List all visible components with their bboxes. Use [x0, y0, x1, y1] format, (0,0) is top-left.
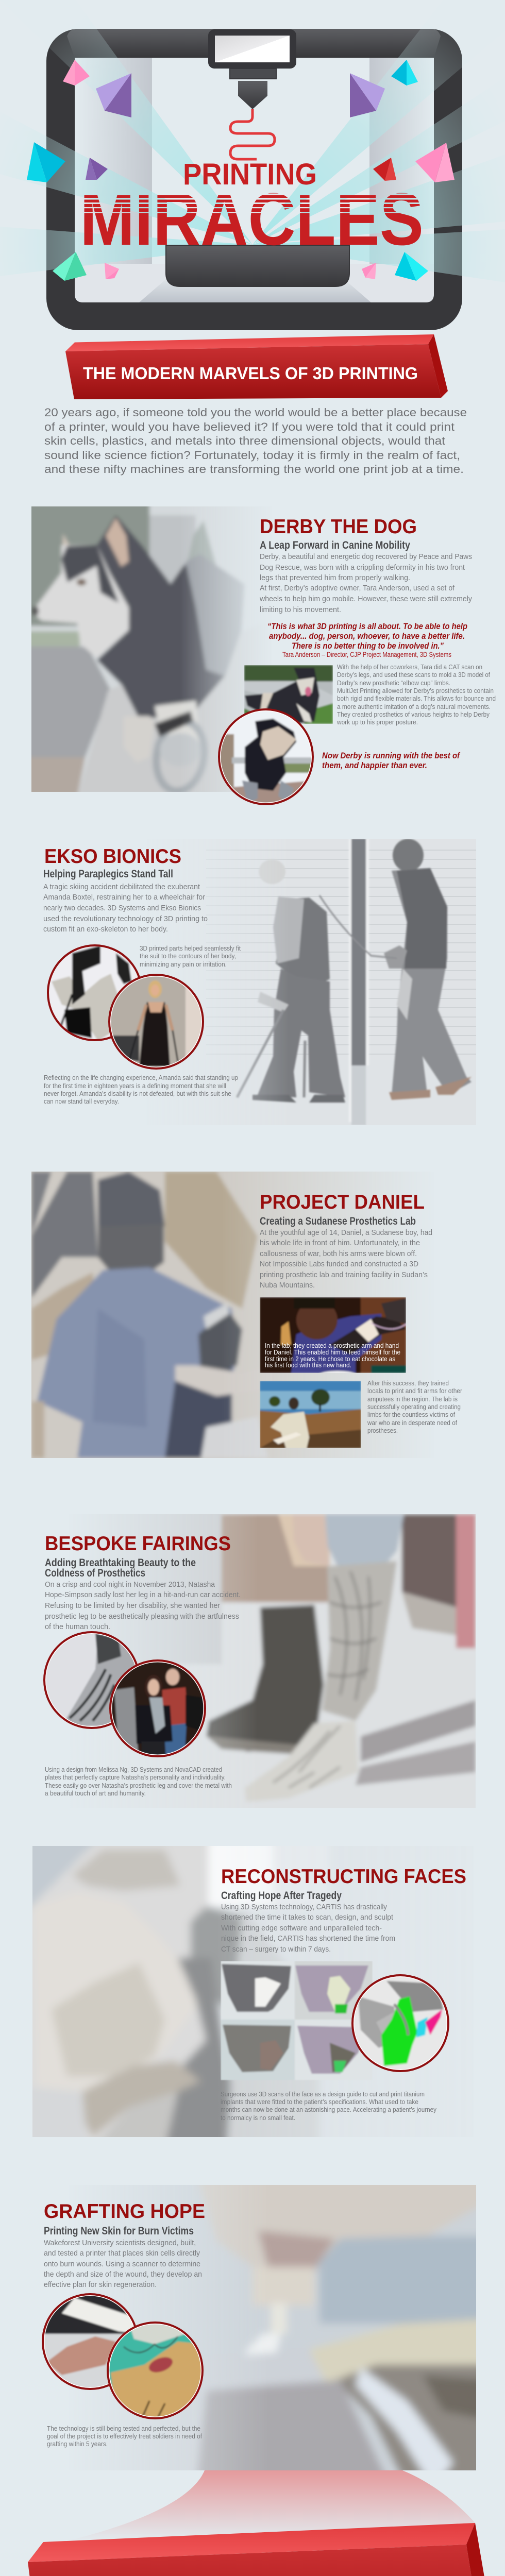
reflection text: [44, 1074, 238, 1105]
story text: legs that prevented him from properly walking.: [260, 573, 410, 582]
title: Printing Miracles: PRINTING: [183, 158, 317, 191]
reflection text: for the first time in eighteen years is a defining moment that she will: [44, 1082, 226, 1090]
gem shapes: [27, 60, 454, 281]
story text: Amanda Boxtel, restraining her to a wheelchair for: [43, 893, 205, 902]
story text: At first, Derby’s adoptive owner, Tara Anderson, used a set of: [260, 584, 455, 592]
photo grid: printed skull models: [221, 1961, 373, 2080]
photo: Daniel outdoors: [260, 1381, 361, 1448]
side text: [336, 664, 496, 726]
heading: EKSO BIONICS: [44, 845, 181, 868]
conclusion banner: [28, 2470, 497, 2576]
story text: effective plan for skin regeneration.: [44, 2280, 157, 2289]
story text: Wakeforest University scientists designed, built,: [44, 2239, 196, 2247]
story text: nearly two decades. 3D Systems and Ekso Bionics: [43, 904, 201, 912]
header: 3D printer illustration: [0, 0, 505, 330]
story text: [43, 883, 208, 934]
closing line: [322, 751, 460, 770]
story text: CT scan – surgery to within 7 days.: [221, 1945, 331, 1954]
panel: Bespoke Fairings: [44, 1510, 479, 1814]
intro paragraph: and these nifty machines are transforming the world one print job at a time.: [44, 463, 464, 476]
photo: skin printer nozzle: [52, 2169, 495, 2488]
story text: On a crisp and cool night in November 2013, Natasha: [45, 1580, 215, 1589]
banner: the modern marvels: [65, 334, 448, 399]
side text: both rigid and flexible materials. This allows for bounce and: [337, 695, 496, 702]
side text: Derby’s new prosthetic “elbow cup” limbs.: [337, 680, 450, 687]
side text: successfully operating and creating: [367, 1403, 461, 1411]
circle photo: Natasha and team: [110, 1660, 205, 1759]
side text: After this success, they trained: [367, 1380, 449, 1387]
photo: hand holding printed nose: [21, 1834, 484, 2148]
surgeons text: implants that were fitted to the patient’s specifications. What used to take: [221, 2098, 418, 2106]
story text: A tragic skiing accident debilitated the exuberant: [43, 883, 200, 891]
story text: [45, 1580, 241, 1631]
subheading: [45, 1557, 196, 1579]
closing line: Now Derby is running with the best of: [322, 751, 460, 760]
surgeons text: [221, 2091, 437, 2122]
story text: onto burn wounds. Using a scanner to determine: [44, 2260, 200, 2268]
quote: “This is what 3D printing is all about. To be able to help: [267, 622, 467, 631]
story text: Nuba Mountains.: [260, 1281, 315, 1290]
quote: [267, 622, 467, 658]
story text: Dog Rescue, was born with a crippling deformity in his two front: [260, 563, 465, 572]
heading: GRAFTING HOPE: [44, 2200, 205, 2223]
print bed: [166, 245, 349, 286]
subheading: Printing New Skin for Burn Victims: [44, 2225, 194, 2237]
story text: of the human touch.: [45, 1622, 110, 1631]
intro paragraph: skin cells, plastics, and metals into three dimensional objects, would that: [44, 434, 445, 447]
intro paragraph: 20 years ago, if someone told you the world would be a better place because: [44, 406, 467, 419]
heading: BESPOKE FAIRINGS: [45, 1533, 231, 1555]
intro paragraph: of a printer, would you have believed it? If you were told that it could print: [44, 420, 454, 433]
circle photo: printer over hand: [43, 2294, 139, 2392]
panel: Derby the Dog: [26, 502, 496, 809]
subheading: Adding Breathtaking Beauty to the: [45, 1557, 196, 1569]
story text: used the revolutionary technology of 3D printing to: [43, 914, 208, 923]
side text: a more authentic imitation of a dog’s natural movements.: [337, 703, 491, 710]
photo: ornate prosthetic leg and boot: [62, 1510, 479, 1814]
story text: With cutting edge software and unparalleled tech-: [221, 1924, 382, 1933]
design text: a beautiful touch of art and humanity.: [45, 1790, 146, 1797]
design text: Using a design from Melissa Ng, 3D Systems and NovaCAD created: [45, 1766, 222, 1773]
circle photo: colour coded skull scan: [352, 1975, 448, 2074]
side text: prostheses.: [367, 1427, 398, 1434]
story text: callousness of war, both his arms were blown off.: [260, 1249, 417, 1258]
printer frame: [46, 29, 462, 330]
circle photo: woman in suit: [109, 974, 206, 1072]
light rays: [0, 0, 505, 282]
photo: Derby on the grass: [244, 665, 333, 724]
side text: limbs for the countless victims of: [367, 1411, 455, 1418]
story text: Derby, a beautiful and energetic dog recovered by Peace and Paws: [260, 552, 472, 561]
story text: [221, 1903, 395, 1954]
design text: plates that perfectly capture Natasha’s personality and individuality.: [45, 1774, 226, 1781]
photo: Daniel eating with caption: his first food with this new hand.: [265, 1362, 351, 1369]
reflection text: can now stand tall everyday.: [44, 1098, 119, 1105]
side text: work up to his proper posture.: [336, 719, 418, 726]
banner: the modern marvels: THE MODERN MARVELS OF 3D PRINTING: [83, 364, 418, 383]
side text: Derby’s legs, and used these scans to mold a 3D model of: [337, 671, 490, 679]
story text: [260, 1228, 432, 1290]
subheading: Helping Paraplegics Stand Tall: [43, 868, 173, 880]
circle photo: leg design render: [44, 1632, 139, 1730]
panel: Ekso Bionics: [43, 839, 476, 1125]
side text: 3D printed parts helped seamlessly fit: [140, 945, 241, 952]
subheading: A Leap Forward in Canine Mobility: [260, 539, 410, 551]
design text: [45, 1766, 232, 1797]
technology text: The technology is still being tested and perfected, but the: [47, 2425, 200, 2432]
surgeons text: months can now be done at an astonishing pace. Accelerating a patient’s journey: [221, 2106, 437, 2113]
story text: Hope-Simpson sadly lost her leg in a hit-and-run car accident.: [45, 1590, 241, 1599]
technology text: grafting within 5 years.: [47, 2441, 108, 2448]
side text: [367, 1380, 462, 1434]
photo: dog with prosthetic wheels: [31, 506, 252, 792]
side text: They created prosthetics of various heights to help Derby: [337, 711, 490, 718]
surgeons text: Surgeons use 3D scans of the face as a design guide to cut and print titanium: [221, 2091, 425, 2098]
story text: Refusing to be limited by her disability, she wanted her: [45, 1601, 220, 1610]
red printed filament: [230, 109, 275, 159]
panel: Project Daniel: [26, 1167, 462, 1463]
design text: These easily go over Natasha’s prosthetic leg and cover the metal with: [45, 1782, 232, 1789]
story text: wheels to help him go mobile. However, these were still extremely: [259, 595, 472, 603]
technology text: goal of the project is to effectively treat soldiers in need of: [47, 2433, 202, 2440]
intro paragraph: sound like science fiction? Fortunately, today it is firmly in the realm of fact,: [44, 449, 460, 462]
closing line: them, and happier than ever.: [322, 761, 427, 770]
story text: Using 3D Systems technology, CARTIS has drastically: [221, 1903, 387, 1911]
story text: prosthetic leg to be aesthetically pleasing with the artfulness: [45, 1612, 239, 1621]
subheading: Coldness of Prosthetics: [45, 1567, 145, 1579]
title: Printing Miracles: MIRACLES: [80, 178, 424, 261]
intro paragraph: [44, 406, 467, 476]
side text: MultiJet Printing allowed for Derby’s prosthetics to contain: [337, 687, 494, 694]
technology text: [47, 2425, 202, 2448]
subheading: Crafting Hope After Tragedy: [221, 1890, 342, 1902]
story text: custom fit an exo-skeleton to her body.: [43, 925, 168, 934]
circle photo: exoskeleton parts: [47, 945, 142, 1043]
photo: Daniel eating with caption: [260, 1297, 406, 1378]
quote: anybody... dog, person, whoever, to have a better life.: [269, 632, 465, 641]
story text: [44, 2239, 202, 2289]
story text: [259, 552, 472, 614]
story text: and tested a printer that places skin cells directly: [44, 2249, 200, 2258]
side text: [140, 945, 241, 968]
side text: amputees in the region. The lab is: [367, 1396, 458, 1403]
panel: Grafting Hope: [43, 2169, 495, 2488]
side text: minimizing any pain or irritation.: [140, 961, 227, 968]
story text: printing prosthetic lab and training facility in Sudan’s: [260, 1270, 428, 1279]
side text: the suit to the contours of her body,: [140, 953, 236, 960]
quote: Tara Anderson – Director, CJP Project Management, 3D Systems: [282, 651, 451, 658]
side text: war who are in desperate need of: [367, 1419, 457, 1427]
photo: woman walking in exoskeleton: [144, 839, 476, 1125]
photo: Daniel eating with caption: first time in 2 years. He chose to eat chocolate as: [265, 1355, 395, 1363]
reflection text: Reflecting on the life changing experience, Amanda said that standing up: [44, 1074, 238, 1081]
photo: Daniel with prosthetic arm: [26, 1167, 443, 1463]
printer interior: [75, 58, 434, 302]
story text: shortened the time it takes to scan, design, and sculpt: [221, 1913, 394, 1922]
heading: PROJECT DANIEL: [260, 1191, 425, 1213]
side text: With the help of her coworkers, Tara did a CAT scan on: [337, 664, 482, 671]
reflection text: never forget. Amanda’s disability is not defeated, but with this suit she: [44, 1090, 231, 1097]
photo: Daniel eating with caption: for Daniel. This enabled him to feed himself for the: [265, 1349, 400, 1356]
quote: There is no better thing to be involved in.”: [292, 641, 444, 651]
story text: limiting to his movement.: [260, 605, 341, 614]
title: Printing Miracles: [85, 163, 421, 245]
story text: his whole life in front of him. Unfortunately, in the: [260, 1239, 420, 1247]
heading: DERBY THE DOG: [260, 516, 417, 538]
heading: RECONSTRUCTING FACES: [221, 1866, 466, 1888]
circle photo: Derby running: [218, 709, 314, 809]
surgeons text: to normalcy is no small feat.: [221, 2114, 295, 2122]
panel: Reconstructing Faces: [21, 1834, 484, 2148]
circle photo: wound on hand: [108, 2323, 204, 2421]
story text: nique in the field, CARTIS has shortened the time from: [221, 1934, 395, 1943]
photo: Daniel eating with caption: In the lab, they created a prosthetic arm and hand: [265, 1342, 399, 1349]
side text: locals to print and fit arms for other: [367, 1387, 462, 1395]
print head: [208, 29, 296, 109]
subheading: Creating a Sudanese Prosthetics Lab: [260, 1215, 416, 1227]
story text: the depth and size of the wound, they develop an: [44, 2270, 202, 2279]
story text: Not Impossible Labs funded and constructed a 3D: [260, 1260, 418, 1268]
story text: At the youthful age of 14, Daniel, a Sudanese boy, had: [260, 1228, 432, 1237]
